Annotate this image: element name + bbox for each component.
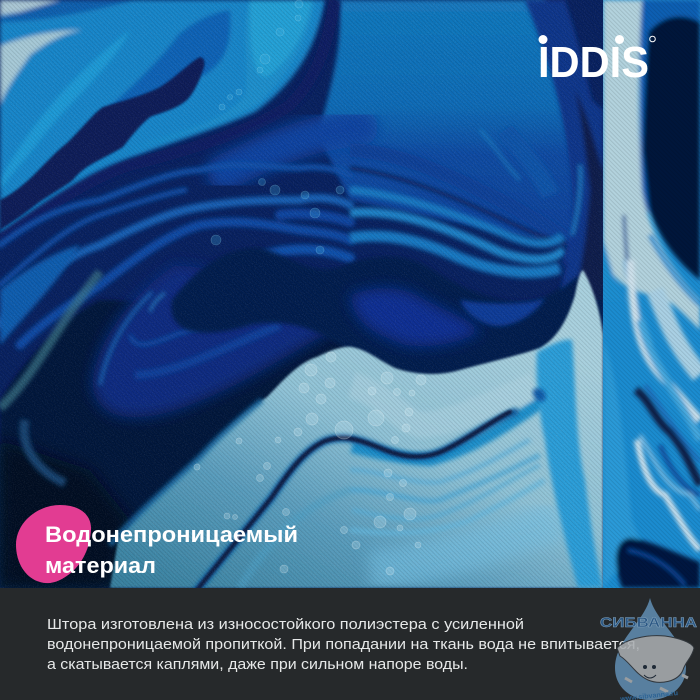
white wavy stripes xyxy=(630,260,700,420)
dark curved stripe in light area xyxy=(197,412,515,590)
droplets upper fabric xyxy=(211,0,344,254)
dark vertical band beside curtain fold xyxy=(525,0,603,300)
dark area top right xyxy=(640,0,700,280)
translucent blue bands in light area xyxy=(240,385,560,588)
navy blob and wave xyxy=(169,248,603,374)
icon: water drop xyxy=(615,598,686,700)
royal-blue blob in navy wave xyxy=(350,288,480,346)
blue fringe along light edge xyxy=(110,400,262,545)
light water-repellent area xyxy=(110,270,603,588)
curtain fold right panel xyxy=(603,0,700,588)
central light-blue vertical patch xyxy=(537,340,603,588)
blue stripes mid-left xyxy=(0,165,350,345)
dark stripe beside cyan swirl xyxy=(0,0,335,240)
pink blob behind heading xyxy=(16,505,91,583)
greenish streak xyxy=(0,272,100,408)
top-left bright swirl xyxy=(0,0,325,235)
speckle grain xyxy=(0,0,603,588)
description text xyxy=(47,616,640,673)
blue band at left edge xyxy=(0,245,80,345)
soft blue patch mid-left xyxy=(225,128,360,172)
lower-left navy field xyxy=(0,298,344,588)
dark blob bottom right xyxy=(616,538,700,588)
heading: материал xyxy=(45,553,156,578)
centre-top blue field xyxy=(318,0,590,250)
bottom dark panel xyxy=(0,588,700,700)
heading xyxy=(45,522,298,578)
centre-top stripes converging to chevron xyxy=(350,130,570,273)
curtain main panel xyxy=(0,0,603,590)
description text: а скатывается каплями, даже при сильном напоре воды. xyxy=(47,656,468,673)
navy blob upper-left xyxy=(0,57,205,230)
description text: водонепроницаемой пропиткой. При попадании на ткань вода не впитывается, xyxy=(47,636,640,653)
deep blue swirl xyxy=(92,265,350,417)
watermark: Sibvanna logo xyxy=(600,598,697,700)
description text: Штора изготовлена из износостойкого полиэстера с усиленной xyxy=(47,616,524,633)
logo: IDDIS: IDDIS xyxy=(538,38,649,87)
brand name: СИБВАННА xyxy=(600,615,697,630)
heading: Водонепроницаемый xyxy=(45,522,298,547)
water droplets xyxy=(194,352,426,575)
icon: bathtub xyxy=(617,636,694,692)
white strip xyxy=(603,0,700,330)
